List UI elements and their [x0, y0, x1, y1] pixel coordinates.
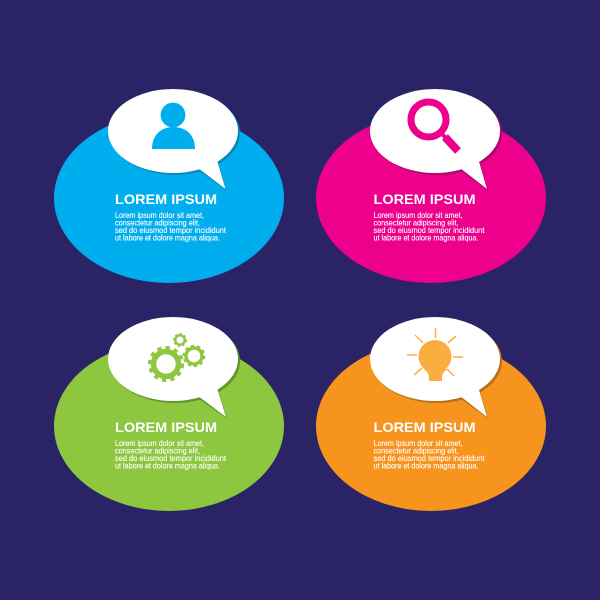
panel: pink	[316, 89, 546, 283]
heading: LOREM IPSUM	[115, 191, 217, 207]
text block: consectetur adipiscing elit,	[374, 446, 458, 456]
text block: Lorem ipsum dolor sit amet,	[115, 438, 204, 448]
text block: Lorem ipsum dolor sit amet,	[115, 210, 204, 220]
heading: LOREM IPSUM	[374, 419, 476, 435]
panel: blue	[54, 89, 284, 283]
panel: green	[54, 317, 284, 511]
speech bubble	[108, 89, 238, 189]
text block: sed do eiusmod tempor incididunt	[115, 453, 227, 463]
text block: ut labore et dolore magna aliqua.	[115, 460, 220, 470]
icon: magnifying glass	[411, 102, 458, 151]
pink oval	[316, 113, 546, 283]
text block: sed do eiusmod tempor incididunt	[115, 225, 227, 235]
text block: Lorem ipsum dolor sit amet,	[374, 210, 462, 220]
text block: consectetur adipiscing elit,	[115, 218, 200, 228]
speech bubble shadow	[110, 319, 240, 418]
icon: light bulb	[407, 328, 463, 381]
speech bubble	[370, 317, 500, 417]
speech bubble shadow	[372, 91, 502, 190]
text block: Lorem ipsum dolor sit amet,	[374, 438, 462, 448]
speech bubble	[370, 89, 500, 189]
speech bubble shadow	[372, 319, 502, 418]
text block: ut labore et dolore magna aliqua.	[374, 232, 478, 242]
heading: LOREM IPSUM	[374, 191, 476, 207]
speech bubble	[108, 317, 238, 417]
text block	[115, 210, 227, 242]
text block	[374, 210, 485, 242]
blue oval	[54, 113, 284, 283]
text block: ut labore et dolore magna aliqua.	[374, 460, 478, 470]
icon: gears	[150, 334, 204, 380]
heading: LOREM IPSUM	[115, 419, 217, 435]
speech bubble shadow	[110, 91, 240, 190]
text block: consectetur adipiscing elit,	[374, 218, 458, 228]
panel: orange	[316, 317, 546, 511]
icon: person	[152, 103, 195, 149]
text block: sed do eiusmod tempor incididunt	[374, 225, 485, 235]
text block	[374, 438, 485, 470]
text block: consectetur adipiscing elit,	[115, 446, 200, 456]
text block	[115, 438, 227, 470]
text block: sed do eiusmod tempor incididunt	[374, 453, 485, 463]
green oval	[54, 341, 284, 511]
orange oval	[316, 341, 546, 511]
text block: ut labore et dolore magna aliqua.	[115, 232, 220, 242]
